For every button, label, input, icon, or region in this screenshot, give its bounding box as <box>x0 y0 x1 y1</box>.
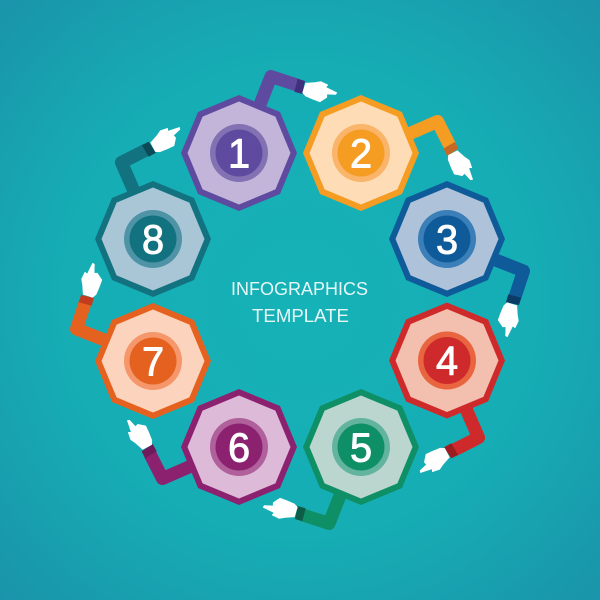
panel: step 2 <box>303 95 484 211</box>
title: INFOGRAPHICS <box>231 278 368 299</box>
octagon 8: 8 <box>142 216 164 263</box>
title <box>231 278 368 326</box>
octagon 2 <box>303 95 419 211</box>
octagon 3: 3 <box>436 216 458 263</box>
octagon 5: 5 <box>350 424 372 471</box>
title: TEMPLATE <box>252 305 349 326</box>
octagon 5 <box>303 389 419 505</box>
octagon 2: 2 <box>350 130 372 177</box>
panel: step 7 <box>76 263 211 419</box>
arm and pointing hand 6 <box>116 411 193 487</box>
arm and pointing hand 5 <box>263 493 341 524</box>
arm and pointing hand 8 <box>113 116 189 193</box>
arm and pointing hand 2 <box>407 113 484 189</box>
octagon 6 <box>181 389 297 505</box>
arm and pointing hand 1 <box>259 76 337 107</box>
panel: step 5 <box>263 389 419 524</box>
arm and pointing hand 4 <box>411 407 487 484</box>
octagon 1 <box>181 95 297 211</box>
octagon 3 <box>389 181 505 297</box>
panel: step 1 <box>181 76 337 211</box>
panel: step 4 <box>389 302 505 484</box>
octagon 7: 7 <box>142 338 164 385</box>
panel: step 8 <box>95 116 211 297</box>
octagon 4: 4 <box>436 337 458 384</box>
panel: step 3 <box>389 181 524 337</box>
arm and pointing hand 3 <box>493 259 524 337</box>
octagon 1: 1 <box>228 130 250 177</box>
panel: step 6 <box>116 389 297 505</box>
octagon 7 <box>95 303 211 419</box>
octagon 4 <box>389 302 505 418</box>
octagon 6: 6 <box>228 424 250 471</box>
octagon 8 <box>95 181 211 297</box>
arm and pointing hand 7 <box>76 263 107 341</box>
